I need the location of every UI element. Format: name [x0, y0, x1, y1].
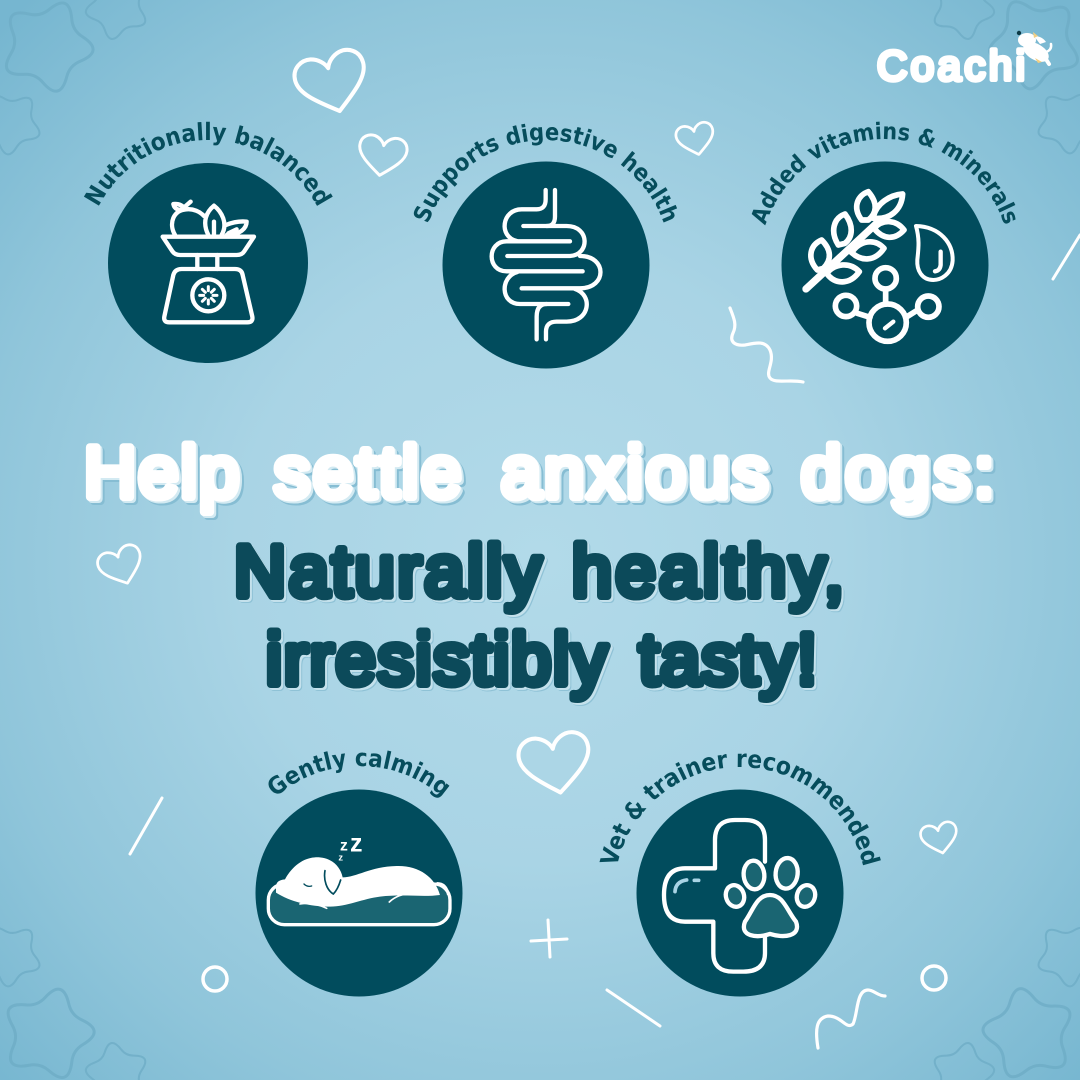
panel: supports digestive health [414, 124, 677, 368]
panel: gently calming [256, 750, 462, 996]
panel: added vitamins and minerals [752, 122, 1016, 368]
badge circle [256, 790, 462, 996]
zzz: z [338, 852, 343, 862]
icon: sleeping dog on bed [268, 830, 450, 925]
curved label: vet and trainer recommended: Vet & trainer recommended [600, 754, 881, 866]
logo: Coachi [877, 31, 1052, 89]
heading: help settle anxious dogs: settle [274, 433, 461, 513]
panel: vet and trainer recommended [600, 754, 881, 996]
logo wordmark: Coachi [877, 42, 1025, 89]
heading: naturally healthy, irresistibly tasty: healthy, [572, 532, 844, 612]
panel: nutritionally balanced [84, 122, 333, 363]
curved label: added vitamins and minerals: Added vitamins & minerals [752, 122, 1016, 226]
icon: intestines [492, 190, 600, 339]
curved label: nutritionally balanced: Nutritionally balanced [84, 122, 333, 206]
logo icon: leaping dog [1017, 31, 1052, 66]
heading: help settle anxious dogs: anxious [501, 433, 768, 513]
curved label: gently calming: Gently calming [268, 750, 450, 798]
heading: naturally healthy, irresistibly tasty: Naturally [234, 532, 541, 612]
icon: cross with paw [664, 820, 818, 972]
zzz: z [350, 830, 362, 858]
zzz: z [340, 837, 348, 854]
badge circle [782, 162, 988, 368]
badge circle [442, 162, 650, 368]
heading: help settle anxious dogs [84, 433, 994, 513]
decorative lines, plus, circles and squiggles [130, 235, 1080, 1048]
heading: naturally healthy, irresistibly tasty: irresistibly [266, 620, 607, 700]
zzz [338, 830, 362, 862]
decorative hearts [95, 46, 960, 857]
heading: naturally healthy, irresistibly tasty [234, 532, 844, 700]
badge circle [108, 163, 308, 363]
icon: kitchen scale with fruit [163, 202, 254, 322]
heading: help settle anxious dogs: dogs: [801, 433, 994, 513]
curved label: supports digestive health: Supports digestive health [414, 124, 677, 222]
badge circle [636, 790, 844, 996]
icon: wheat, drop and molecules [806, 192, 953, 341]
heading: help settle anxious dogs: Help [84, 433, 239, 513]
heading: naturally healthy, irresistibly tasty: tasty! [639, 620, 817, 700]
